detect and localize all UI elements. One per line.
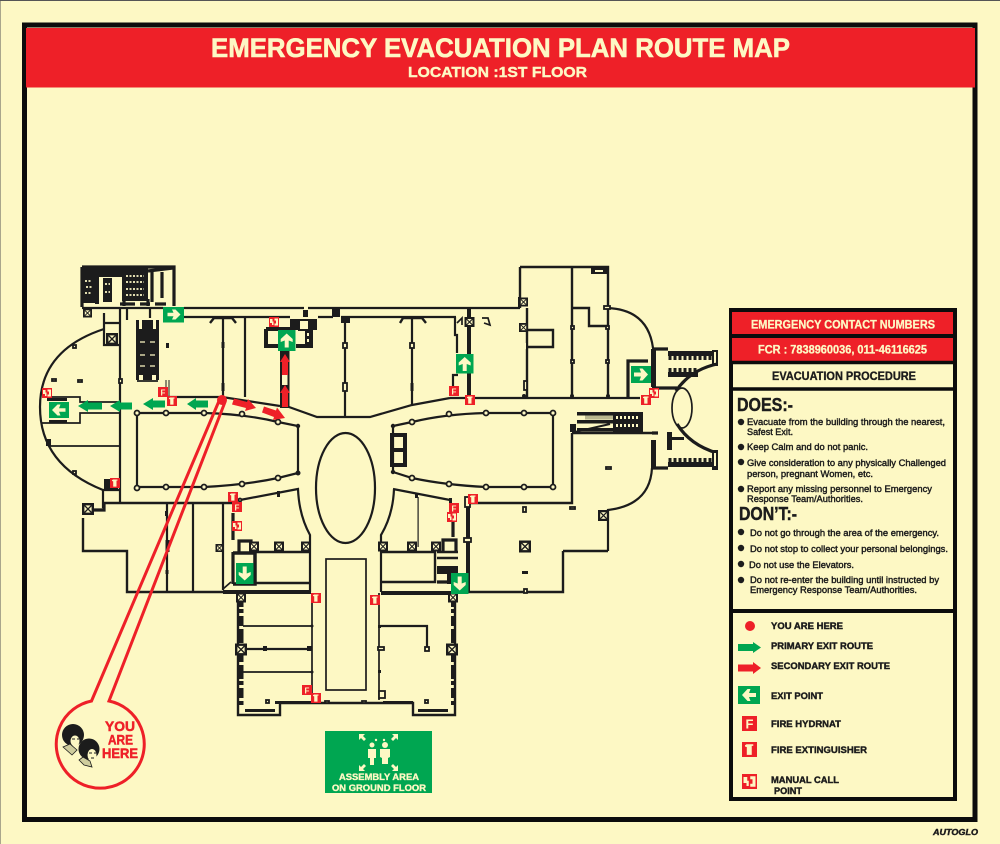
legend: primary exit route	[738, 641, 873, 653]
legend: fire hydrant: F	[746, 716, 754, 732]
divider between contact bars	[732, 334, 953, 338]
north rooms partitions	[210, 318, 426, 417]
panel: evacuation procedure heading	[731, 362, 957, 389]
exit sign: top corridor	[163, 307, 184, 322]
does list: Safest Exit.	[747, 427, 793, 437]
marker: you are here dot	[217, 395, 227, 405]
panel: emergency contact numbers: EMERGENCY CONTACT NUMBERS	[751, 318, 935, 332]
assembly text: ON GROUND FLOOR	[332, 783, 426, 794]
escalator	[575, 412, 643, 432]
exit sign: stair room north	[278, 330, 296, 351]
don't list: Do not stop to collect your personal belongings.	[750, 544, 948, 554]
secondary exit route arrows	[232, 354, 290, 420]
manual call point markers	[42, 317, 659, 531]
legend: primary exit route: PRIMARY EXIT ROUTE	[771, 641, 873, 651]
exit room frame right	[628, 361, 648, 397]
does list: Report any missing personnel to Emergency	[747, 484, 932, 494]
does list	[737, 395, 946, 504]
panel: FCR number: FCR : 7838960036, 011-46116625	[758, 342, 927, 356]
legend	[738, 621, 890, 796]
legend: manual call point: POINT	[774, 786, 802, 796]
primary exit route arrows	[78, 398, 208, 412]
floor plan	[40, 267, 718, 715]
fire hydrant markers: F	[452, 388, 457, 396]
panel: evacuation procedure heading: EVACUATION PROCEDURE	[772, 369, 916, 383]
bubble text	[102, 718, 138, 761]
left rounded hall	[40, 308, 122, 508]
legend: exit point	[738, 686, 824, 704]
you are here pointer and bubble	[56, 395, 227, 788]
legend: exit point: EXIT POINT	[771, 691, 824, 701]
plan safety markers	[42, 317, 659, 703]
does list: Evacuate from the building through the nearest,	[747, 417, 945, 427]
exit sign: south-east	[451, 573, 468, 594]
don't list: Do not re-enter the building until instructed by	[750, 575, 939, 585]
central oval atrium	[316, 433, 375, 543]
legend: you are here: YOU ARE HERE	[771, 621, 843, 631]
don't list: Do not use the Elevators.	[749, 560, 854, 570]
legend: you are here	[745, 621, 843, 631]
stair block left	[136, 320, 169, 397]
central left corridor walls	[167, 397, 450, 417]
red corridor and stair room	[266, 319, 317, 408]
assembly text	[332, 772, 426, 794]
information panel	[731, 310, 957, 799]
does list: person, pregnant Women, etc.	[747, 469, 873, 479]
icon: two faces	[62, 724, 100, 767]
central long rectangle	[326, 559, 366, 690]
don't list: Do not go through the area of the emergency.	[750, 528, 939, 538]
panel: FCR number	[732, 338, 953, 361]
bubble text: YOU	[105, 718, 135, 734]
south block	[235, 592, 458, 715]
does list: Keep Calm and do not panic.	[747, 442, 868, 452]
legend: fire extinguisher	[742, 742, 868, 757]
top-left service block	[82, 267, 174, 318]
assembly text: ASSEMBLY AREA	[339, 772, 419, 783]
title: EMERGENCY EVACUATION PLAN ROUTE MAP	[211, 33, 790, 63]
exit sign: north-east	[456, 354, 474, 374]
exit sign: east wing	[631, 366, 651, 383]
fire hydrant markers	[158, 386, 459, 696]
fire hydrant markers: F	[305, 686, 310, 696]
bubble text: ARE	[108, 732, 133, 748]
exit sign: west hall	[49, 402, 69, 418]
fire hydrant markers: F	[235, 504, 240, 512]
title banner	[26, 28, 975, 88]
subtitle: location: LOCATION :1ST FLOOR	[408, 64, 587, 81]
legend: fire hydrant: FIRE HYDRNAT	[771, 719, 842, 729]
lower right wing	[468, 424, 652, 593]
legend: manual call point: MANUAL CALL	[771, 775, 840, 785]
top corridor walls	[82, 308, 520, 320]
fire hydrant markers: F	[161, 388, 166, 398]
don't list: DON’T:-	[739, 504, 797, 524]
legend: secondary exit route	[738, 661, 890, 674]
maker mark: AUTOGLO	[932, 828, 979, 837]
don't list	[738, 504, 948, 595]
panel: emergency contact numbers	[732, 312, 953, 334]
legend: fire hydrant	[742, 716, 842, 732]
don't list: Emergency Response Team/Authorities.	[750, 585, 917, 595]
legend: secondary exit route: SECONDARY EXIT ROUTE	[771, 661, 890, 671]
does list: Response Team/Authorities.	[747, 494, 863, 504]
assembly area sign	[325, 731, 432, 794]
fire extinguisher markers	[110, 395, 651, 703]
upper right wing	[520, 267, 653, 398]
fire hydrant markers: F	[452, 504, 457, 514]
legend: fire extinguisher: FIRE EXTINGUISHER	[771, 745, 868, 755]
right stair and entrance wing	[651, 349, 718, 470]
central rooms	[134, 410, 556, 490]
does list: DOES:-	[737, 395, 793, 415]
south-west rooms	[223, 489, 452, 592]
legend: manual call point	[742, 774, 840, 796]
exit sign: south-west	[236, 563, 254, 584]
lower left wing	[82, 503, 233, 592]
right side north rooms	[450, 267, 640, 398]
bubble text: HERE	[102, 745, 138, 761]
south-east rooms	[378, 497, 471, 593]
does list: Give consideration to any physically Challenged	[747, 458, 946, 468]
icon: assembly people and arrows	[359, 734, 398, 771]
